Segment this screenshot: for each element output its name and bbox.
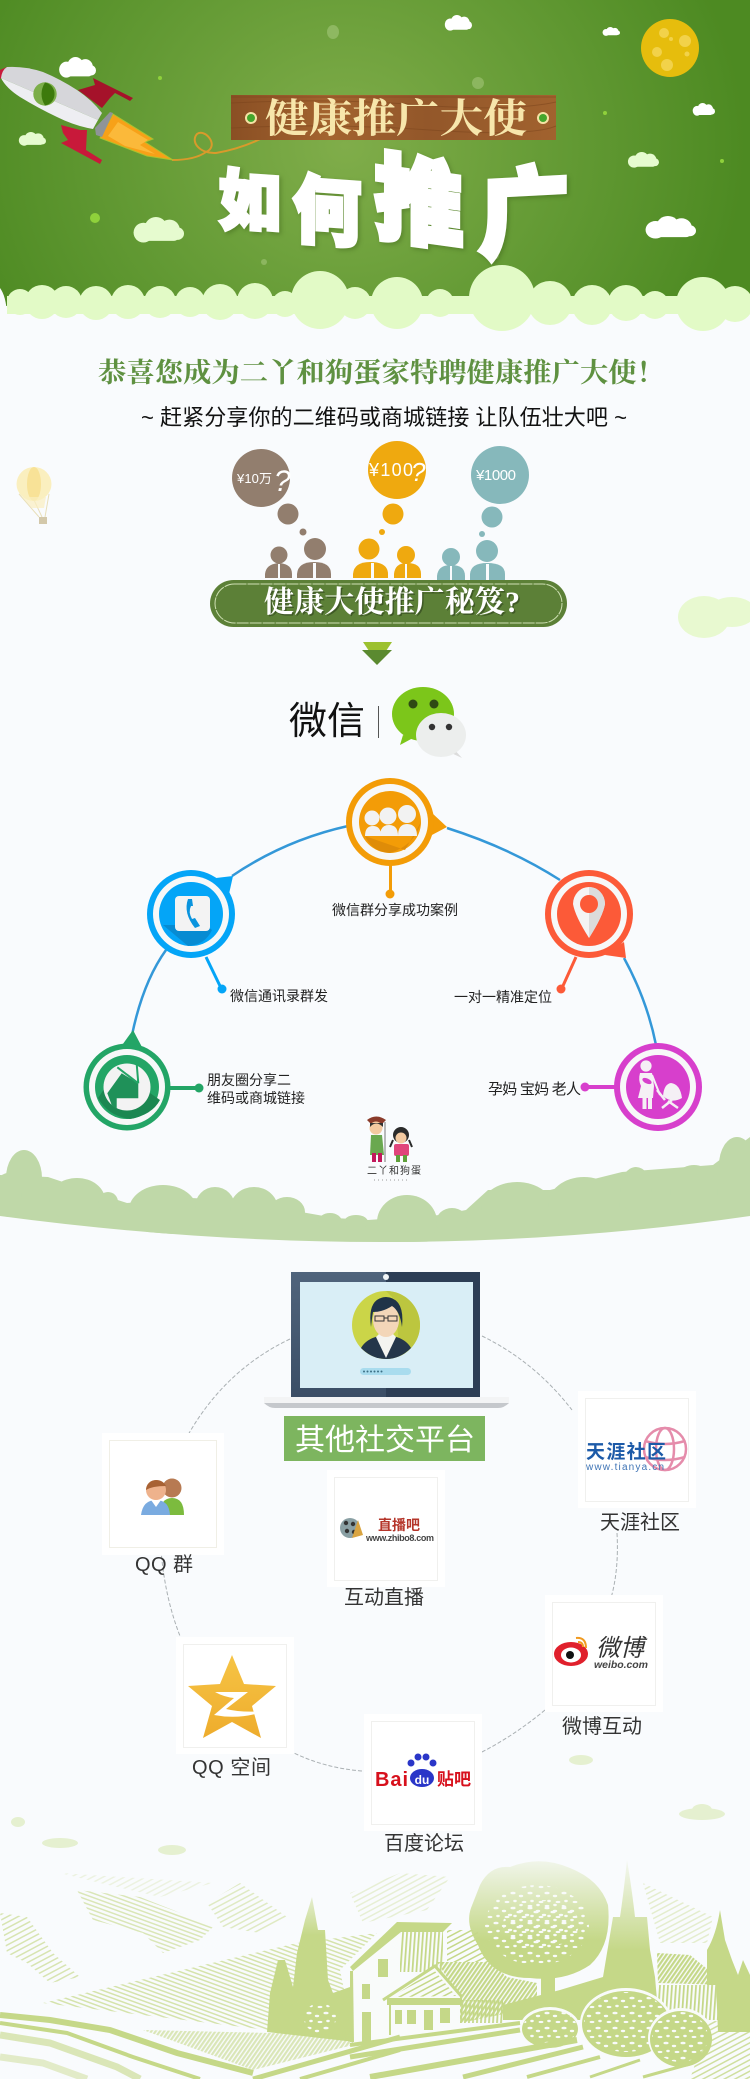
- icon: weibo eye: [554, 1638, 588, 1666]
- card: live streaming: [327, 1470, 445, 1609]
- dashed orbit lines: [161, 1336, 617, 1771]
- panel: earnings bubbles and people: [232, 441, 529, 580]
- panel: WeChat logo: 微信: [289, 701, 365, 743]
- landscape illustration: [0, 1860, 750, 2079]
- card: Tianya: 天涯社区: [586, 1440, 666, 1463]
- icon: globe: [644, 1428, 686, 1470]
- faint green clouds: [11, 1755, 725, 1855]
- card: live streaming: 直播吧: [378, 1517, 420, 1533]
- title: 如何推广: [219, 146, 569, 271]
- icon: baidu paw: [408, 1754, 436, 1787]
- banner: secret tips pill: 健康大使推广秘笈?: [266, 586, 522, 620]
- card: QQ group: [102, 1433, 224, 1576]
- far hills: [0, 1873, 713, 1983]
- mid hill: [43, 1933, 377, 2033]
- label: 维码或商城链接: [207, 1090, 305, 1106]
- large cypress and ground mass: [503, 1860, 657, 2020]
- ground: [143, 2030, 353, 2070]
- card: Tianya: [578, 1391, 696, 1534]
- card: Tianya: www.tianya.cn: [585, 1462, 664, 1473]
- moon: [641, 19, 699, 77]
- panel: laptop with avatar: [264, 1272, 509, 1408]
- card: Weibo: 微博: [596, 1635, 648, 1662]
- icon: QQ people: [141, 1478, 184, 1515]
- card: Weibo: [545, 1595, 663, 1738]
- green hills divider: [0, 1137, 750, 1242]
- heading: other social platforms: 其他社交平台: [295, 1424, 475, 1457]
- label: 互动直播: [344, 1586, 424, 1609]
- logo: 二丫和狗蛋 characters: [367, 1116, 421, 1180]
- house: [350, 1922, 537, 2045]
- card: Baidu: Bai: [375, 1769, 408, 1791]
- node: audience: [488, 1043, 702, 1131]
- label: QQ 空间: [192, 1756, 271, 1779]
- avatar: [352, 1291, 420, 1359]
- clouds: [19, 15, 715, 242]
- icon: film reel: [340, 1518, 363, 1538]
- label: 朋友圈分享二: [207, 1072, 291, 1088]
- panel: earnings bubbles and people: ?: [274, 465, 291, 498]
- label: 孕妈 宝妈 老人: [488, 1081, 581, 1098]
- icon: zone star: [188, 1655, 276, 1738]
- node: group share: [332, 778, 458, 918]
- node: moments: [84, 1030, 305, 1130]
- heading: congratulations: 恭喜您成为二丫和狗蛋家特聘健康推广大使！: [98, 357, 665, 388]
- label: 一对一精准定位: [454, 989, 552, 1005]
- label: 天涯社区: [600, 1511, 680, 1534]
- banner: secret tips pill: [210, 580, 567, 627]
- node: contacts: [147, 870, 328, 1004]
- orange bubble: [353, 441, 426, 578]
- panel: earnings bubbles and people: ?: [411, 457, 426, 487]
- fields: [0, 2015, 690, 2079]
- card: Baidu: du: [415, 1773, 429, 1787]
- wooden sign: 健康推广大使: [265, 96, 527, 141]
- label: 百度论坛: [384, 1832, 464, 1855]
- title: 如何推广: 广: [479, 159, 569, 271]
- teal bubble: [437, 446, 529, 580]
- label: QQ 群: [135, 1553, 193, 1576]
- icon: double down arrow: [362, 642, 392, 665]
- card: Weibo: weibo.com: [594, 1659, 648, 1671]
- panel: earnings bubbles and people: ¥10万: [236, 471, 272, 486]
- card: Baidu: [364, 1714, 482, 1855]
- panel: earnings bubbles and people: ¥100: [368, 460, 413, 480]
- oak tree: [469, 1861, 609, 2010]
- label: 微信通讯录群发: [230, 988, 328, 1004]
- panel: WeChat logo: [289, 687, 466, 758]
- far right cypress: [707, 1910, 750, 2032]
- label: 微博互动: [562, 1715, 642, 1738]
- title: 如何推广: 如: [219, 163, 281, 242]
- bushes: [520, 1988, 714, 2068]
- title: 如何推广: 何: [293, 170, 361, 257]
- decorative green cloud: [678, 596, 750, 638]
- cloud band: [0, 265, 750, 350]
- brown bubble: [232, 449, 331, 578]
- panel: earnings bubbles and people: ¥1000: [475, 467, 516, 484]
- icon: hot air balloon: [16, 467, 52, 524]
- panel: header banner: [0, 0, 750, 350]
- rocket: [0, 67, 270, 164]
- card: Baidu: 贴吧: [437, 1770, 471, 1789]
- card: live streaming: www.zhibo8.com: [365, 1533, 434, 1543]
- label: 微信群分享成功案例: [332, 902, 458, 918]
- logo: 二丫和狗蛋 characters: 二丫和狗蛋: [367, 1164, 421, 1177]
- node: targeting: [454, 870, 633, 1005]
- arc connecting circles: [132, 826, 656, 1045]
- right small house: [657, 1953, 727, 2020]
- title: 如何推广: 推: [375, 146, 463, 263]
- cypress left: [267, 1897, 355, 2042]
- card: QQ zone: [176, 1637, 294, 1779]
- icon: wechat bubbles: [392, 687, 466, 758]
- heading: other social platforms: [284, 1416, 485, 1461]
- label: [207, 1072, 305, 1106]
- banner: secret tips pill: 健康大使推广秘笈?: [264, 585, 520, 619]
- subheading: ~ 赶紧分享你的二维码或商城链接 让队伍壮大吧 ~: [141, 405, 627, 430]
